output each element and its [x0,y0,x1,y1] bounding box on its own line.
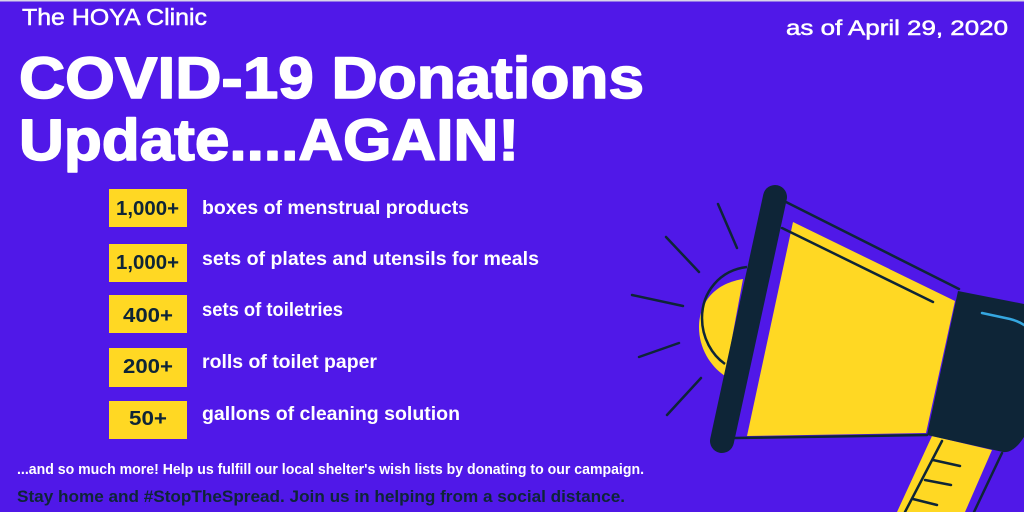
item: toiletries: 400+ [123,305,173,327]
organisation name: The HOYA Clinic [22,4,207,30]
icon: megaphone [632,197,1024,512]
date: as of April 29, 2020 [786,17,1008,40]
megaphone rear dome [699,279,743,376]
sound rays [632,204,737,415]
item: toilet paper: 200+ [123,356,173,378]
donation list [109,189,539,439]
item: plates and utensils: 1,000+ [116,252,179,274]
item: toilet paper [109,348,378,387]
item: toiletries: sets of toiletries [202,300,343,321]
item: plates and utensils [109,244,539,282]
handle [897,436,992,512]
item: menstrual products: 1,000+ [116,198,179,220]
item: menstrual products: boxes of menstrual products [202,198,469,219]
cone [747,222,955,436]
item: toilet paper: rolls of toilet paper [202,352,378,373]
item: plates and utensils: sets of plates and utensils for meals [202,249,539,270]
highlight [982,313,1024,325]
item: menstrual products [109,189,469,227]
item: toiletries [109,295,343,333]
title [19,46,644,173]
item: cleaning solution: 50+ [129,408,167,430]
title: Update....AGAIN! [19,108,519,173]
closing line: Stay home and #StopTheSpread. Join us in helping from a social distance. [17,487,625,506]
title: COVID-19 Donations [19,46,644,111]
item: cleaning solution: gallons of cleaning solution [202,404,460,425]
call to action: ...and so much more! Help us fulfill our local shelter's wish lists by donating to our campaign. [17,461,644,478]
body [927,291,1024,452]
rim [722,197,775,441]
item: cleaning solution [109,401,460,439]
